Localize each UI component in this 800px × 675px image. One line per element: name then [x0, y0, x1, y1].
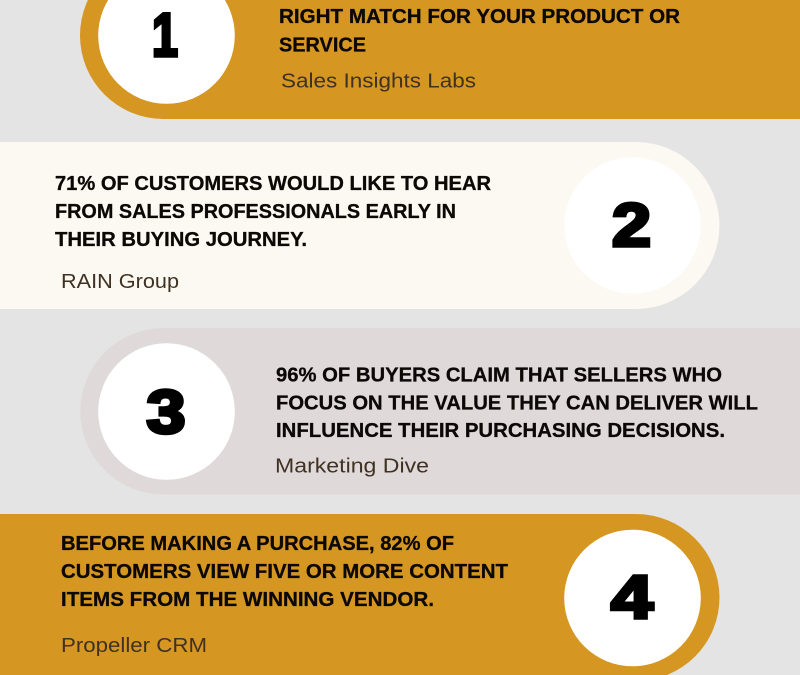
panel: statistic 3 — [80, 328, 800, 494]
statistic 4 text: BEFORE MAKING A PURCHASE, 82% OF — [61, 533, 454, 555]
statistic 2 text: FROM SALES PROFESSIONALS EARLY IN — [55, 201, 456, 223]
statistic 2 text — [55, 173, 492, 251]
statistic 3 text — [276, 364, 758, 442]
statistic 3 text: INFLUENCE THEIR PURCHASING DECISIONS. — [276, 420, 725, 442]
statistic 2 text: 71% OF CUSTOMERS WOULD LIKE TO HEAR — [55, 173, 492, 195]
panel: statistic 1 — [80, 0, 800, 119]
number circle 1: 1 — [152, 1, 178, 69]
band 2 background — [0, 142, 720, 309]
statistic 4 text — [61, 533, 508, 611]
number circle 2 — [564, 157, 701, 294]
statistic 4 text: CUSTOMERS VIEW FIVE OR MORE CONTENT — [61, 561, 508, 583]
statistic 4 text: ITEMS FROM THE WINNING VENDOR. — [61, 589, 434, 611]
number circle 1 — [98, 0, 235, 104]
panel: statistic 2 — [0, 142, 720, 309]
statistic 2 text: THEIR BUYING JOURNEY. — [55, 229, 307, 251]
statistic 1 text — [279, 6, 681, 56]
number circle 2: 2 — [612, 191, 651, 259]
source 3: Marketing Dive — [275, 456, 429, 478]
statistic 1 text: SERVICE — [279, 34, 366, 56]
number circle 4 — [564, 530, 701, 666]
statistic 3 text: FOCUS ON THE VALUE THEY CAN DELIVER WILL — [276, 392, 758, 414]
band 3 background — [80, 328, 800, 494]
number circle 3 — [98, 343, 235, 480]
band 1 background — [80, 0, 800, 119]
statistic 1 text: RIGHT MATCH FOR YOUR PRODUCT OR — [279, 6, 681, 28]
source 2: RAIN Group — [61, 271, 179, 293]
source 4: Propeller CRM — [61, 635, 207, 657]
source 1: Sales Insights Labs — [281, 70, 476, 92]
panel: statistic 4 — [0, 514, 720, 675]
number circle 3: 3 — [146, 378, 186, 446]
band 4 background — [0, 514, 720, 675]
statistic 3 text: 96% OF BUYERS CLAIM THAT SELLERS WHO — [276, 364, 722, 386]
number circle 4: 4 — [611, 563, 653, 631]
